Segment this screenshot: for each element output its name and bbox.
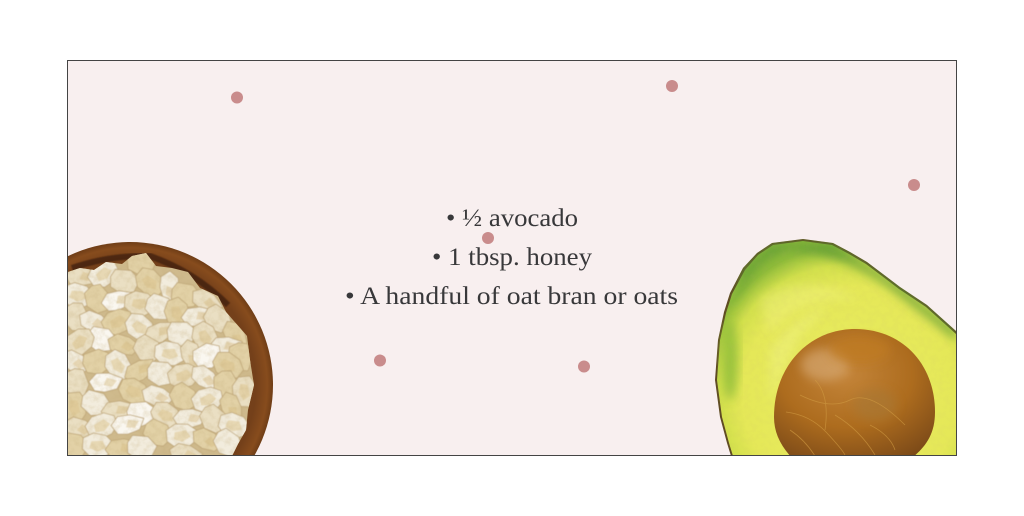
ingredient: oat bran or oats: • A handful of oat bran or oats <box>345 283 678 310</box>
oat flakes <box>68 253 254 455</box>
avocado pit <box>774 329 935 458</box>
illustration: bowl of oats <box>68 242 273 455</box>
avocado flesh <box>710 235 960 460</box>
avocado skin <box>715 239 956 456</box>
panel: ingredients background <box>68 60 956 456</box>
ingredient: honey: • 1 tbsp. honey <box>432 244 593 271</box>
bowl <box>68 242 273 455</box>
ingredient: half avocado: • ½ avocado <box>446 205 578 232</box>
ingredients list <box>345 205 678 310</box>
decorative dots <box>231 80 920 372</box>
illustration: avocado half <box>710 235 960 460</box>
